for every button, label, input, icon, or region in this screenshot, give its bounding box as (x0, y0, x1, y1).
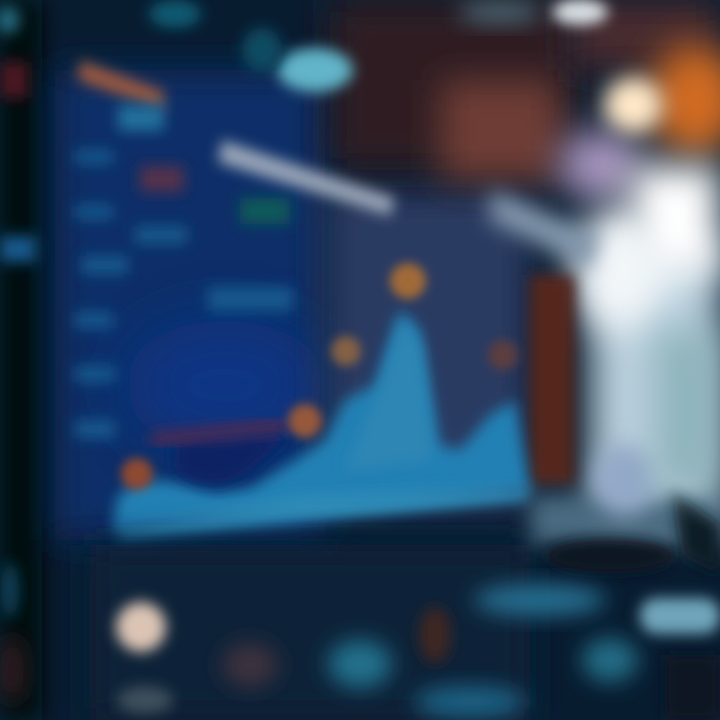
panel: dark brown top area (330, 0, 720, 180)
area chart (112, 263, 530, 540)
table rows: left column of blurred labels (0, 150, 293, 438)
icons: top cyan blobs (0, 0, 542, 92)
chart marker: orange points (121, 263, 518, 490)
lower blurred highlights (0, 562, 720, 720)
light flare: orange and white (552, 0, 720, 332)
dark red column (530, 275, 574, 485)
light beam to the left of the flare (490, 190, 600, 270)
heading: blurred title bar (218, 140, 395, 216)
coloured table cells (0, 60, 290, 224)
panel: monitor base and lower dark area (90, 330, 720, 720)
